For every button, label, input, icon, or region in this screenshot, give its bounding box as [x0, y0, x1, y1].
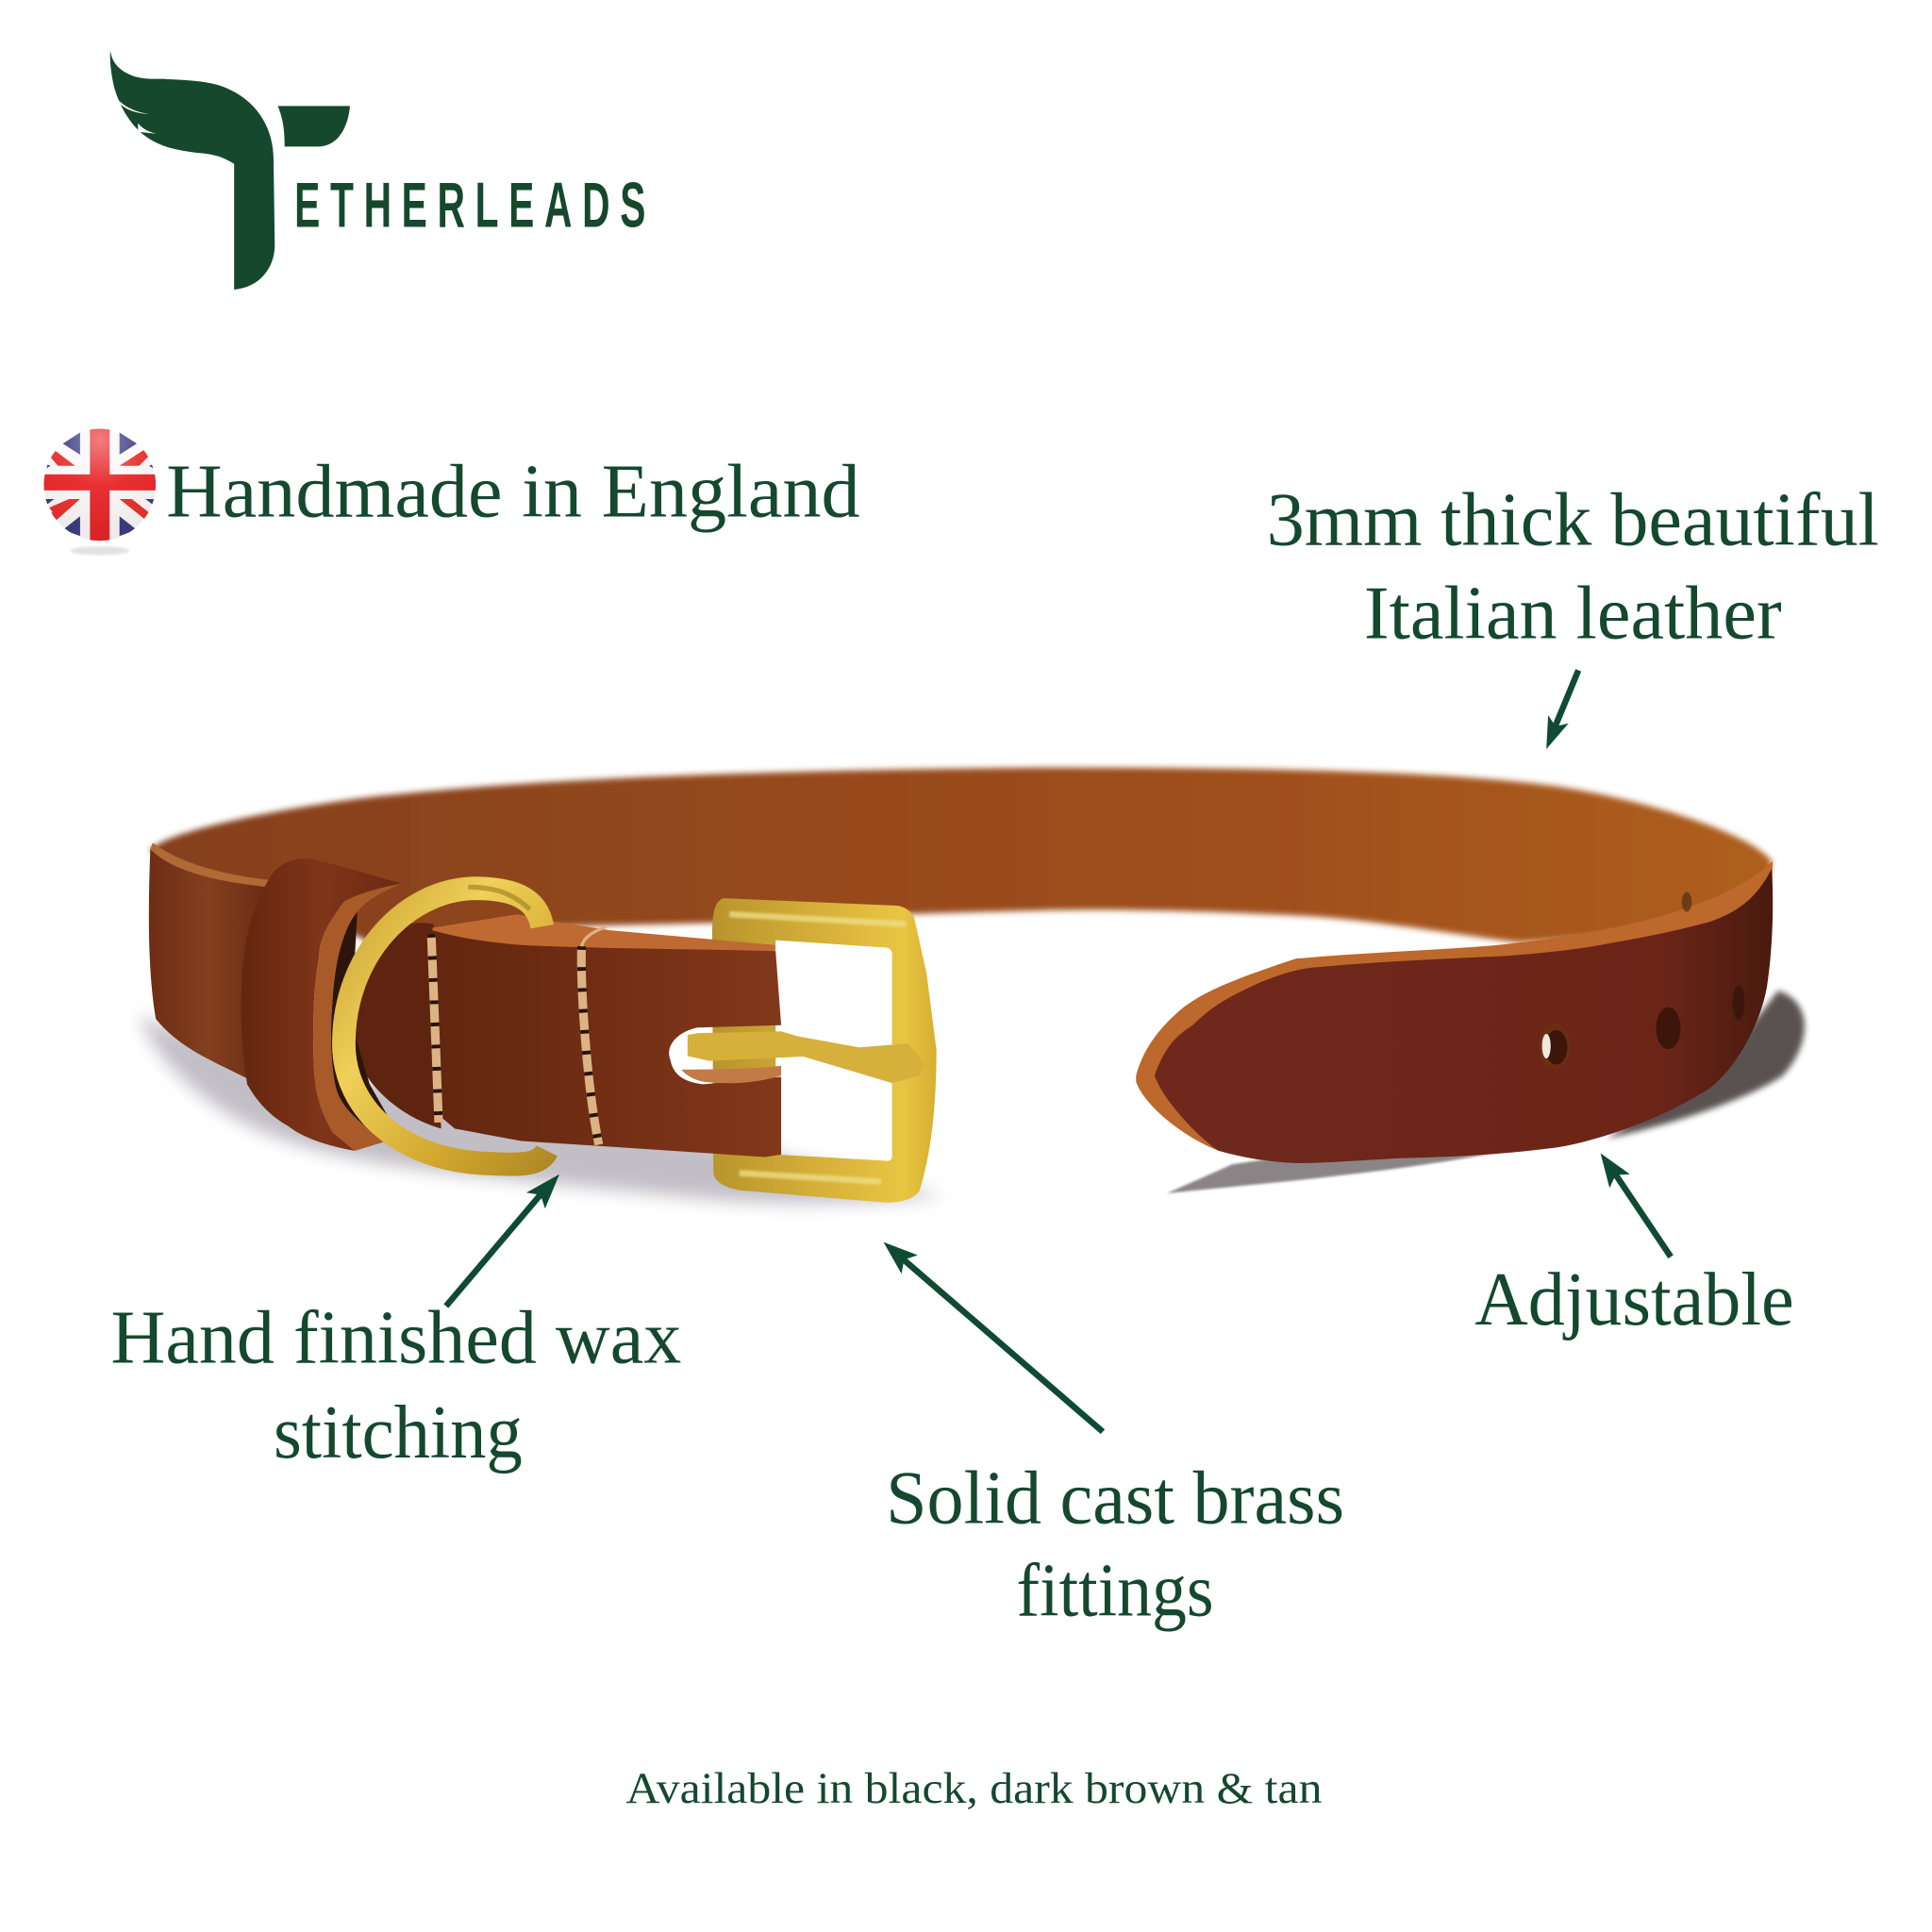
wordmark: ETHERLEADS — [294, 168, 645, 241]
left outer band — [149, 849, 269, 1078]
callout: Solid cast brass fittings: Solid cast brass — [886, 1455, 1344, 1540]
strap top edge — [432, 914, 775, 957]
back inner leather band — [150, 768, 1772, 942]
callout: Italian leather — [1267, 476, 1879, 656]
footnote: colours: Available in black, dark brown & tan — [626, 1764, 1322, 1813]
keeper loop — [242, 858, 402, 1151]
icon: UK flag badge — [43, 428, 157, 556]
D-ring — [343, 887, 547, 1164]
arrow: to stitching — [446, 1174, 559, 1306]
strap front — [430, 930, 781, 1157]
collar illustration — [140, 768, 1805, 1203]
left band lip — [150, 842, 269, 887]
strap fold behind D-ring — [351, 923, 441, 1128]
callout: Hand finished wax stitching: stitching — [274, 1390, 523, 1474]
logo: Tetherleads — [110, 51, 645, 290]
heading: Handmade in England: Handmade in England — [166, 448, 860, 533]
arrow: to leather — [1546, 671, 1578, 749]
stitching — [431, 926, 607, 1144]
callout: Adjustable: Adjustable — [1474, 1257, 1794, 1341]
buckle frame — [712, 898, 937, 1203]
callout: Italian leather: Italian leather — [1364, 571, 1782, 656]
arrow: to adjustable holes — [1601, 1154, 1671, 1257]
callout: Hand finished wax stitching: Hand finished wax — [111, 1295, 681, 1380]
slit lower edge — [681, 1066, 781, 1083]
adjustment holes — [1539, 892, 1744, 1068]
callout: Solid cast brass fittings — [886, 1455, 1344, 1632]
buckle pin — [688, 1031, 925, 1083]
callout: Italian leather: 3mm thick beautiful — [1267, 476, 1879, 561]
buckle highlights — [729, 914, 906, 1182]
arrow: to brass fittings — [883, 1242, 1103, 1432]
icon: winged T — [110, 51, 350, 290]
callout: Hand finished wax stitching — [111, 1295, 681, 1474]
right tip strap — [1136, 861, 1773, 1163]
floor shadows — [140, 991, 1805, 1203]
callout: Solid cast brass fittings: fittings — [1017, 1547, 1214, 1632]
